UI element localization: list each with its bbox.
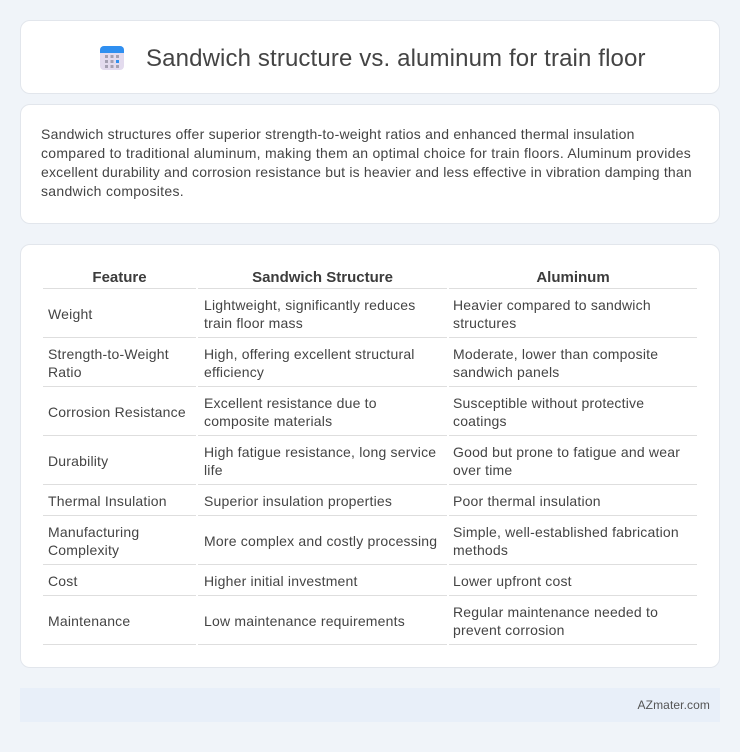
row: Weight: Weight [48,306,93,322]
row: Corrosion Resistance: Corrosion Resistance [48,404,186,420]
row: Cost: Cost [48,573,78,589]
row: Durability: over time [453,462,512,478]
row: Durability: Good but prone to fatigue and wear [453,444,680,460]
row: Maintenance: Maintenance [48,613,130,629]
row: Strength-to-Weight Ratio: Moderate, lower than composite [453,346,658,362]
row: Strength-to-Weight Ratio: Strength-to-Weight [48,346,169,362]
row: Durability: High fatigue resistance, long service [204,444,436,460]
row: Manufacturing Complexity: Complexity [48,542,119,558]
row: Cost [48,573,572,589]
table header: Feature: Feature [92,269,147,286]
text block: summary paragraph: excellent durability and corrosion resistance but is heavier and less effective in vibration damping than [41,164,692,180]
row: Maintenance [48,604,658,638]
row: Weight: structures [453,315,516,331]
row: Maintenance: Low maintenance requirements [204,613,405,629]
row: Weight: Lightweight, significantly reduces [204,297,415,313]
text block: summary paragraph [41,126,692,199]
footer credit: AZmater.com [638,698,710,712]
row: Weight [48,297,651,331]
panel: summary [20,104,720,224]
row: Manufacturing Complexity: More complex and costly processing [204,533,437,549]
row: Thermal Insulation: Superior insulation properties [204,493,392,509]
row: Thermal Insulation [48,493,601,509]
row: Cost: Higher initial investment [204,573,358,589]
panel: comparison table card [20,244,720,668]
table header: Aluminum: Aluminum [536,269,610,286]
title: Sandwich structure vs. aluminum for train floor [146,45,646,72]
row: Strength-to-Weight Ratio [48,346,658,380]
row: Strength-to-Weight Ratio: sandwich panels [453,364,560,380]
row: Durability [48,444,680,478]
row: Thermal Insulation: Thermal Insulation [48,493,167,509]
row: Strength-to-Weight Ratio: Ratio [48,364,82,380]
text block: summary paragraph: compared to traditional aluminum, making them an optimal choice for train floors. Aluminum provides [41,145,691,161]
row: Corrosion Resistance: coatings [453,413,507,429]
row: Corrosion Resistance [48,395,644,429]
text block: summary paragraph: sandwich composites. [41,183,184,199]
row: Manufacturing Complexity [48,524,679,558]
row: Manufacturing Complexity: Manufacturing [48,524,139,540]
footer [20,688,720,722]
row: Durability: life [204,462,223,478]
row: Corrosion Resistance: composite materials [204,413,332,429]
row: Durability: Durability [48,453,108,469]
row: Manufacturing Complexity: Simple, well-established fabrication [453,524,679,540]
text block: summary paragraph: Sandwich structures offer superior strength-to-weight ratios and enhanced thermal insulation [41,126,635,142]
row: Corrosion Resistance: Excellent resistance due to [204,395,377,411]
row: Weight: train floor mass [204,315,303,331]
icon: calendar [100,46,124,70]
row: Manufacturing Complexity: methods [453,542,508,558]
row: Corrosion Resistance: Susceptible without protective [453,395,644,411]
row: Maintenance: Regular maintenance needed to [453,604,658,620]
row: Strength-to-Weight Ratio: efficiency [204,364,264,380]
row: Weight: Heavier compared to sandwich [453,297,651,313]
table header: Sandwich Structure: Sandwich Structure [252,269,393,286]
panel: title card [20,20,720,94]
row: Cost: Lower upfront cost [453,573,572,589]
row: Maintenance: prevent corrosion [453,622,565,638]
row: Thermal Insulation: Poor thermal insulation [453,493,601,509]
row: Strength-to-Weight Ratio: High, offering excellent structural [204,346,415,362]
